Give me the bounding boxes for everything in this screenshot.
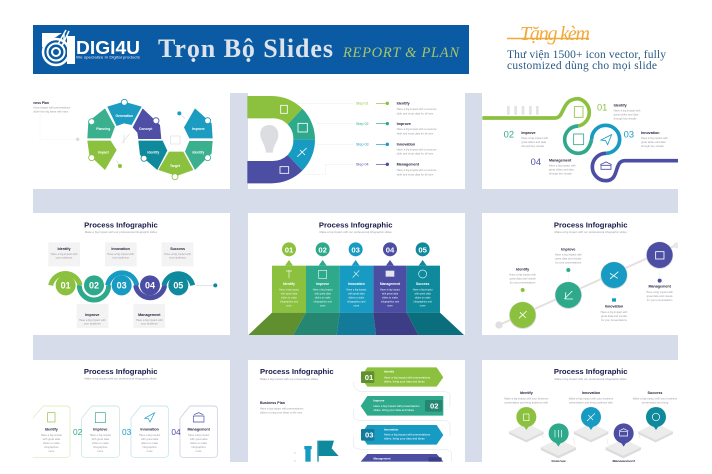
slide 1: two-ring cycle: Generation bbox=[116, 114, 133, 118]
slide 5: five columns: infographics and bbox=[381, 301, 400, 304]
slide 4: wave process bbox=[33, 213, 230, 335]
slide 3: winding path: Innovation bbox=[641, 131, 659, 135]
slide 9: isometric pins bbox=[482, 360, 678, 464]
slide 5: five columns: slides to make bbox=[281, 297, 298, 300]
slide 5: five columns: more bbox=[320, 305, 326, 308]
slide 4: wave process: 02 bbox=[89, 281, 99, 291]
slide 9: isometric pins: presentation and bring audience with bbox=[505, 400, 549, 404]
slide 1: two-ring cycle: slide from big ideas with ease bbox=[33, 110, 69, 114]
slide 2: D-shaped steps: slide and show data for all men bbox=[397, 172, 434, 176]
slide 6: diagonal timeline: Management bbox=[648, 285, 672, 289]
slide 7: outlined cards: Have a big impact bbox=[90, 433, 111, 437]
slide 9: isometric pins: Identify bbox=[520, 391, 534, 395]
slide 5: five columns: with great data bbox=[382, 293, 399, 296]
slide 8: arrow banners: slides to bring your ideas to life now bbox=[260, 410, 302, 414]
slide 9: isometric pins: Make a big impact with your business bbox=[504, 396, 549, 400]
slide 2: D-shaped steps: Have a big impact with a resource bbox=[397, 168, 437, 172]
slide 5: five columns: more bbox=[387, 305, 393, 308]
slide 4: wave process: Management bbox=[138, 313, 161, 317]
slide 6: diagonal timeline bbox=[482, 213, 679, 335]
slide 5: five columns: more bbox=[420, 305, 426, 308]
slide 7: outlined cards: Identify bbox=[45, 428, 59, 432]
slide 7: outlined cards: 03 bbox=[122, 427, 132, 437]
slide 7: outlined cards: slides to make bbox=[190, 441, 208, 445]
slide 4: wave process: Process Infographic bbox=[84, 221, 159, 230]
slide 8: arrow banners: slides, bring your data and ideas bbox=[373, 408, 415, 412]
slide 6: diagonal timeline: Have a big impact with bbox=[601, 310, 628, 314]
slide 7: outlined cards: Management bbox=[187, 428, 211, 432]
slide 2: D-shaped steps: Management bbox=[397, 163, 420, 167]
slide 5: five columns: Improve bbox=[316, 282, 329, 286]
slide 2: D-shaped steps: Improve bbox=[397, 122, 411, 126]
slide 3: winding path: through key visuals bbox=[521, 144, 545, 148]
slide 7: outlined cards: Have a big impact bbox=[188, 433, 210, 437]
slide 8: arrow banners: Have a big impact with presentations bbox=[384, 375, 431, 379]
slide 6: diagonal timeline: great data and visuals bbox=[647, 294, 673, 298]
slide 1: two-ring cycle: Target bbox=[170, 164, 181, 168]
slide 3: winding path: great slides and data bbox=[614, 113, 639, 117]
slide 9: isometric pins: Make a big impact with our professional infographic slides bbox=[554, 377, 627, 381]
slide 3: winding path: great slides and data bbox=[521, 140, 547, 144]
logo: DIGI4U: We specialize in Digital products bbox=[76, 56, 140, 60]
slide 2: D-shaped steps: Innovation bbox=[397, 143, 415, 147]
slide 6: diagonal timeline: for your presentations bbox=[647, 298, 673, 302]
slide 8: arrow banners bbox=[248, 360, 465, 462]
slide 9: isometric pins: presentation and bring bbox=[642, 400, 669, 404]
slide 7: outlined cards: infographics bbox=[191, 445, 206, 449]
slide 5: five columns: Have a big impact bbox=[313, 289, 333, 292]
slide 5: five columns: Make a big impact with our professional infographic slides bbox=[319, 230, 392, 234]
slide 5: five columns: Have a big impact bbox=[346, 289, 367, 292]
slide 4: wave process: 05 bbox=[173, 281, 183, 291]
slide 9: isometric pins: Make a big impact with your business bbox=[569, 396, 614, 400]
slide 8: arrow banners: Innovation bbox=[384, 428, 399, 432]
slide 4: wave process: Have a big impact with bbox=[136, 318, 163, 322]
slide 8: arrow banners: Have a big impact with presentations bbox=[373, 404, 420, 408]
header banner bbox=[33, 25, 469, 74]
slide 2: D-shaped steps: Have a big impact with a resource bbox=[397, 107, 437, 111]
slide 2: D-shaped steps: Step 04 bbox=[356, 163, 369, 167]
slide 2: D-shaped steps: Step 03 bbox=[356, 143, 369, 147]
slide 6: diagonal timeline: Have a big impact with bbox=[555, 253, 582, 257]
slide 5: five columns: 05 bbox=[418, 245, 428, 254]
slide 6: diagonal timeline: Have a big impact with bbox=[509, 273, 537, 277]
slide 4: wave process: your audience bbox=[84, 322, 101, 326]
slide 5: five columns: slides to make bbox=[382, 297, 399, 300]
slide 5: five columns: more bbox=[286, 305, 292, 308]
slide 8: arrow banners: slides, bring your data and ideas bbox=[384, 437, 425, 441]
slide 5: five columns: Have a big impact bbox=[413, 289, 433, 292]
slide 5: five columns: 01 bbox=[285, 245, 294, 254]
slide 5: five columns: more bbox=[353, 305, 360, 308]
slide 8: arrow banners: Improve bbox=[373, 399, 385, 403]
slide 5: five columns: with great data bbox=[315, 293, 331, 296]
slide 6: diagonal timeline: Identify bbox=[516, 267, 530, 271]
slide 8: arrow banners: Management bbox=[373, 456, 391, 460]
slide 4: wave process: Make a big impact with our professional infographic slides bbox=[85, 230, 158, 234]
slide 6: diagonal timeline: Make a big impact with our professional infographic slides bbox=[554, 230, 627, 234]
slide 7: outlined cards: Have a big impact bbox=[41, 433, 62, 437]
slide 3: winding path: Have a big impact with bbox=[549, 164, 576, 168]
slide 1: two-ring cycle: Identify bbox=[147, 150, 159, 154]
slide 8: arrow banners: Have a big impact with presentations bbox=[260, 406, 304, 410]
slide 3: winding path: great slides and data bbox=[641, 140, 666, 144]
slide 1: two-ring cycle: Concept bbox=[139, 127, 153, 131]
slide 7: outlined cards: infographics bbox=[44, 445, 59, 449]
logo: DIGI4U bbox=[42, 30, 140, 65]
slide 4: wave process: Have a big impact with bbox=[79, 318, 106, 322]
slide 2: D-shaped steps: Have a big impact with a resource bbox=[397, 147, 437, 151]
slide 2: D-shaped steps: Step 02 bbox=[356, 122, 369, 126]
slide 7: outlined cards bbox=[33, 360, 230, 462]
slide 6: diagonal timeline: great data and visuals bbox=[510, 277, 536, 281]
slide 7: outlined cards: with great data bbox=[141, 437, 159, 441]
slide 3: winding path: through key visuals bbox=[614, 117, 637, 121]
slide 7: outlined cards: more bbox=[147, 449, 153, 453]
slide 1: two-ring cycle: Planning bbox=[96, 127, 110, 131]
slide 5: five columns: Process Infographic bbox=[319, 221, 393, 230]
bonus description: customized dùng cho mọi slide bbox=[507, 60, 657, 72]
slide 1: two-ring cycle: Improve bbox=[192, 127, 205, 131]
slide 1: two-ring cycle bbox=[33, 93, 230, 189]
slide 3: winding path: Management bbox=[549, 158, 572, 162]
slide 5: five columns: with great data bbox=[281, 293, 298, 296]
slide 6: diagonal timeline: great data and visuals bbox=[601, 314, 628, 318]
slide 3: winding path bbox=[482, 93, 679, 189]
slide 5: five columns: Success bbox=[416, 282, 430, 286]
slide 7: outlined cards: Innovation bbox=[140, 428, 159, 432]
slide 5: five columns: Have a big impact bbox=[380, 289, 400, 292]
slide 7: outlined cards: with great data bbox=[92, 437, 110, 441]
slide 6: diagonal timeline: for your presentations bbox=[510, 281, 536, 285]
slide 9: isometric pins: Management bbox=[612, 460, 636, 464]
slide 7: outlined cards: with great data bbox=[190, 437, 208, 441]
slide 5: five columns: Identify bbox=[283, 282, 295, 286]
slide 6: diagonal timeline: Improve bbox=[561, 248, 575, 252]
slide 8: arrow banners: 02 bbox=[430, 402, 439, 411]
slide 6: diagonal timeline: Process Infographic bbox=[554, 221, 628, 230]
slide 1: two-ring cycle: ness Plan bbox=[33, 101, 49, 105]
slide 4: wave process: your audience bbox=[112, 256, 130, 260]
slide 5: five columns bbox=[248, 213, 465, 335]
slide 2: D-shaped steps: Step 01 bbox=[356, 102, 369, 106]
slide 3: winding path: Have a big impact with bbox=[614, 109, 641, 113]
slide 3: winding path: 03 bbox=[624, 129, 634, 139]
slide 5: five columns: 04 bbox=[386, 245, 395, 254]
slide 5: five columns: slides to make bbox=[415, 297, 431, 300]
slide 3: winding path: through key visuals bbox=[641, 144, 664, 148]
slide 5: five columns: 02 bbox=[318, 245, 327, 254]
slide 3: winding path: 01 bbox=[597, 102, 607, 112]
slide 3: winding path: 02 bbox=[504, 129, 514, 139]
slide 5: five columns: Have a big impact bbox=[279, 289, 299, 292]
logo: DIGI4U: DIGI4U bbox=[76, 38, 140, 58]
slide 6: diagonal timeline: for your presentations bbox=[601, 318, 627, 322]
slide 7: outlined cards: more bbox=[48, 449, 55, 453]
slide 9: isometric pins: Improve bbox=[552, 460, 566, 464]
slide 3: winding path: 04 bbox=[531, 157, 541, 167]
slide 4: wave process: Success bbox=[170, 247, 185, 251]
slide 5: five columns: slides to make bbox=[315, 297, 331, 300]
slide 7: outlined cards: infographics bbox=[142, 445, 157, 449]
slide 8: arrow banners: 03 bbox=[365, 431, 374, 440]
slide 7: outlined cards: Process Infographic bbox=[84, 367, 158, 376]
slide 8: arrow banners: Identify bbox=[384, 370, 394, 374]
bonus note bbox=[507, 23, 666, 72]
slide 1: two-ring cycle: Impact bbox=[98, 150, 110, 154]
slide 4: wave process: Have a big impact with bbox=[51, 252, 78, 256]
slide 6: diagonal timeline: great data and visuals bbox=[555, 257, 582, 261]
bonus description: Thư viện 1500+ icon vector, fully bbox=[507, 49, 666, 61]
slide 7: outlined cards: Improve bbox=[93, 428, 107, 432]
slide 8: arrow banners: Business Plan bbox=[260, 401, 285, 405]
slide 4: wave process: your audience bbox=[169, 256, 187, 260]
slide 5: five columns: infographics and bbox=[347, 301, 366, 304]
slide 2: D-shaped steps bbox=[247, 93, 465, 189]
slide 7: outlined cards: 02 bbox=[73, 427, 83, 437]
slide 2: D-shaped steps: slide and show data for all men bbox=[397, 111, 434, 115]
slide 7: outlined cards: slides to make bbox=[43, 441, 60, 445]
banner subtitle: REPORT & PLAN bbox=[342, 45, 460, 61]
slide 4: wave process: Have a big impact with bbox=[164, 252, 192, 256]
slide 8: arrow banners: Have a big impact with presentations bbox=[384, 433, 431, 437]
slide 5: five columns: with great data bbox=[414, 293, 431, 296]
slide 7: outlined cards: more bbox=[97, 449, 104, 453]
slide 7: outlined cards: Have a big impact bbox=[139, 433, 161, 437]
slide 7: outlined cards: more bbox=[196, 449, 202, 453]
slide 8: arrow banners: Make a big impact with our presentation slides bbox=[260, 377, 319, 381]
slide 4: wave process: Improve bbox=[85, 313, 99, 317]
slide 7: outlined cards: slides to make bbox=[141, 441, 159, 445]
slide grid background bbox=[33, 93, 678, 462]
slide 4: wave process: Have a big impact with bbox=[107, 252, 135, 256]
slide 9: isometric pins: Make a big impact with your business bbox=[633, 396, 678, 400]
slide 9: isometric pins: Process Infographic bbox=[554, 367, 628, 376]
slide 8: arrow banners: 01 bbox=[365, 373, 374, 382]
slide 3: winding path: Identify bbox=[614, 104, 628, 108]
slide 5: five columns: infographics and bbox=[414, 301, 432, 304]
slide 5: five columns: with great data bbox=[348, 293, 365, 296]
slide 7: outlined cards: infographics bbox=[93, 445, 108, 449]
slide 3: winding path: Have a big impact with bbox=[521, 136, 549, 140]
slide 5: five columns: 03 bbox=[351, 245, 360, 254]
slide 8: arrow banners: slides, bring your data and ideas bbox=[384, 379, 425, 383]
slide 5: five columns: infographics and bbox=[314, 301, 332, 304]
slide 9: isometric pins: presentation and bring audience with bbox=[569, 400, 613, 404]
slide 8: arrow banners: Process Infographic bbox=[260, 367, 334, 376]
slide 2: D-shaped steps: slide and show data for all men bbox=[397, 131, 434, 135]
slide 4: wave process: 01 bbox=[61, 281, 71, 291]
slide 7: outlined cards: with great data bbox=[43, 437, 61, 441]
slide 2: D-shaped steps: Have a big impact with a resource bbox=[397, 127, 437, 131]
slide 5: five columns: Management bbox=[380, 282, 401, 286]
slide 4: wave process: 04 bbox=[145, 281, 155, 291]
slide 7: outlined cards: slides to make bbox=[92, 441, 109, 445]
slide 5: five columns: infographics and bbox=[280, 301, 299, 304]
slide 2: D-shaped steps: Identify bbox=[397, 102, 411, 106]
slide 4: wave process: your audience bbox=[141, 322, 158, 326]
slide 5: five columns: Innovation bbox=[348, 282, 365, 286]
slide 2: D-shaped steps: slide and show data for all men bbox=[397, 152, 434, 156]
slide 4: wave process: your audience bbox=[56, 256, 73, 260]
slide 6: diagonal timeline: Have a big impact with bbox=[646, 290, 674, 294]
bonus heading: Tặng kèm bbox=[520, 23, 590, 45]
slide 6: diagonal timeline: Innovation bbox=[605, 305, 623, 309]
slide 3: winding path: through key visuals bbox=[549, 172, 572, 176]
slide 4: wave process: Innovation bbox=[111, 247, 130, 251]
slide 9: isometric pins: Success bbox=[648, 391, 662, 395]
slide 1: two-ring cycle: Keep impact with presentations bbox=[33, 106, 71, 110]
banner title: Trọn Bộ Slides bbox=[158, 34, 333, 63]
slide 3: winding path: Improve bbox=[521, 131, 536, 135]
slide 7: outlined cards: Make a big impact with our professional infographic slides bbox=[85, 376, 157, 380]
slide 5: five columns: slides to make bbox=[348, 297, 365, 300]
slide 4: wave process: 03 bbox=[117, 281, 127, 291]
slide 4: wave process: Identify bbox=[57, 247, 71, 251]
slide 3: winding path: great slides and data bbox=[549, 168, 574, 172]
slide 9: isometric pins: Innovation bbox=[582, 391, 600, 395]
slide 7: outlined cards: 04 bbox=[171, 427, 181, 437]
slide 1: two-ring cycle: Identify bbox=[192, 150, 204, 154]
slide 3: winding path: Have a big impact with bbox=[641, 136, 668, 140]
slide 6: diagonal timeline: for your presentations bbox=[555, 261, 582, 265]
